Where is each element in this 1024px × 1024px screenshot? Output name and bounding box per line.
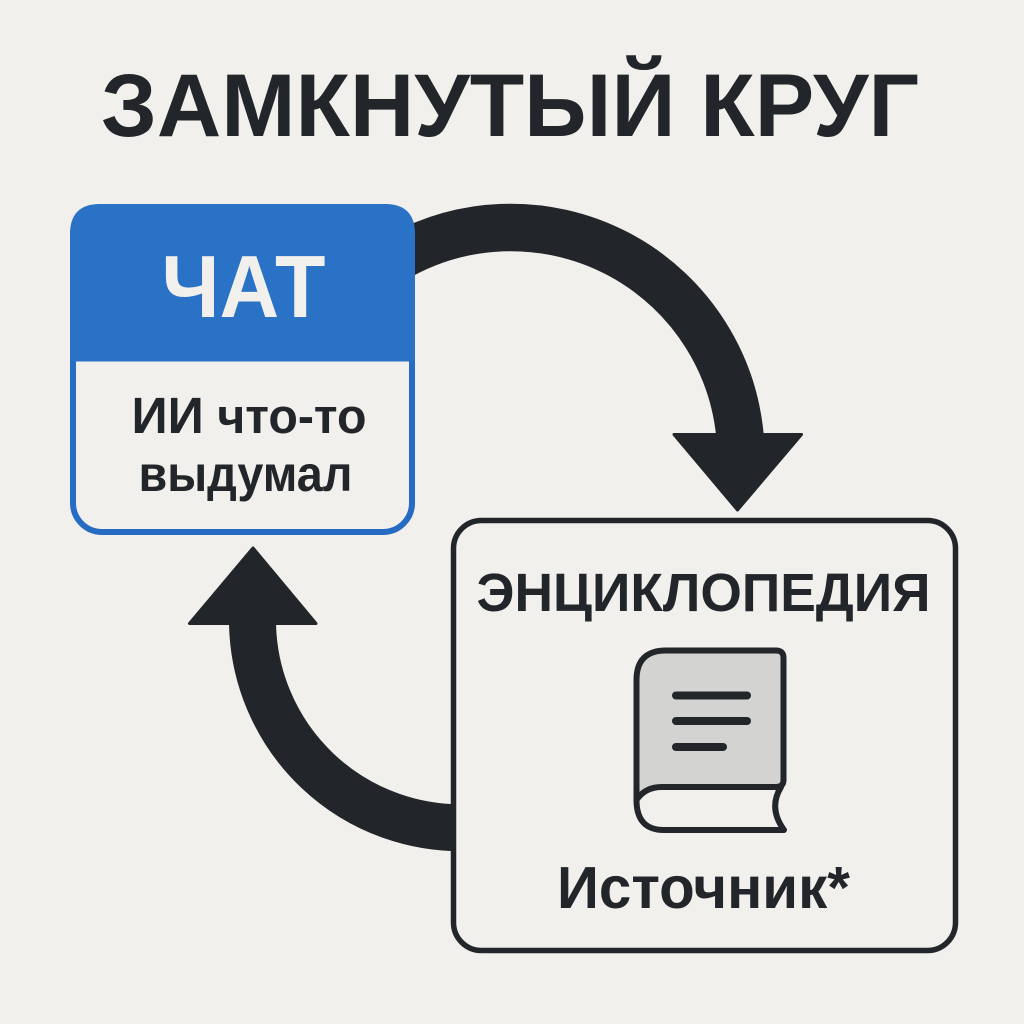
panel: chat — [70, 204, 415, 532]
chat heading: ЧАТ — [162, 237, 326, 336]
chat body text — [132, 387, 366, 502]
chat body text: ИИ что-то — [132, 387, 366, 444]
title: ЗАМКНУТЫЙ КРУГ — [101, 55, 919, 155]
source label: Источник* — [557, 855, 850, 921]
chat header — [70, 204, 415, 362]
arrow: encyclopedia to chat — [190, 548, 470, 828]
chat body text: выдумал — [138, 446, 352, 502]
encyclopedia heading: ЭНЦИКЛОПЕДИЯ — [476, 563, 930, 623]
icon: book — [636, 650, 784, 830]
panel: encyclopedia — [454, 520, 956, 950]
arrow: chat to encyclopedia — [400, 227, 802, 510]
